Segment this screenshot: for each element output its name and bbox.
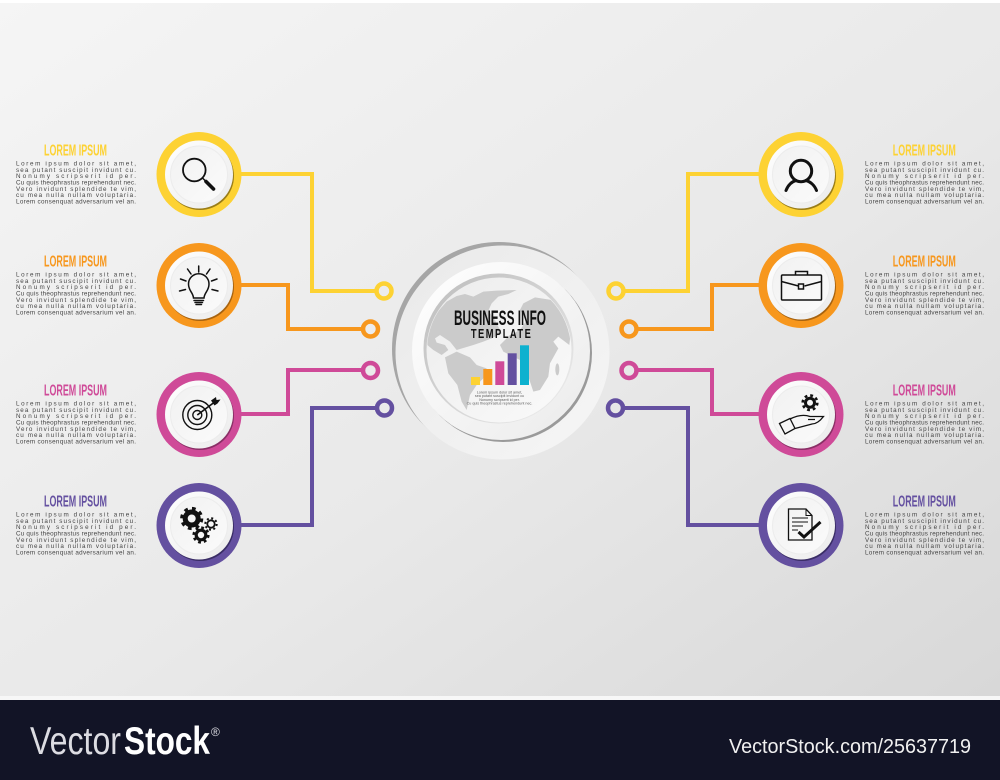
right item 2 text: Cu quis theophrastus reprehendunt nec.	[865, 290, 984, 298]
right item 1 text: LOREM IPSUM	[893, 142, 956, 159]
right item 3: hand with gear	[758, 372, 844, 457]
right item 2 text: Nonumy scripserit id per.	[865, 284, 984, 291]
footer logo: Vector	[30, 720, 121, 763]
right item 4 text: Vero invidunt splendide te vim,	[865, 537, 984, 544]
icon: hand holding gear	[780, 395, 824, 434]
world map	[427, 290, 571, 410]
right item 3 text: Lorem ipsum dolor sit amet,	[865, 400, 984, 408]
center title: TEMPLATE	[471, 328, 531, 341]
icon: magnifier	[183, 159, 214, 189]
right item 3 text	[865, 382, 984, 446]
icon: document with check mark	[788, 509, 820, 540]
footer image id: VectorStock.com/25637719	[729, 736, 971, 758]
left item 3 text	[16, 382, 136, 446]
right item 1 text: Vero invidunt splendide te vim,	[865, 186, 984, 193]
footer logo: ®	[211, 725, 220, 739]
right item 2 text: Lorem ipsum dolor sit amet,	[865, 272, 984, 278]
left item 3 text: sea putant suscipit invidunt cu.	[16, 407, 136, 414]
left item 4 text: Lorem ipsum dolor sit amet,	[16, 512, 136, 518]
right item 4 text: Lorem consenquat adversarium vel an.	[865, 550, 984, 556]
left item 2 text: Lorem ipsum dolor sit amet,	[16, 272, 136, 278]
right item 2 text: cu mea nulla nullam voluptaria.	[865, 303, 984, 310]
left item 3 text: Cu quis theophrastus reprehendunt nec.	[16, 420, 136, 426]
right item 1: user	[758, 132, 844, 217]
left item 4 text: Cu quis theophrastus reprehendunt nec.	[16, 530, 136, 538]
center caption: Nonumy scripserit id per.	[479, 398, 520, 402]
right item 2 text	[865, 253, 984, 316]
bar chart	[471, 345, 529, 385]
left item 1 text: LOREM IPSUM	[44, 142, 107, 159]
right item 1 text: sea putant suscipit invidunt cu.	[865, 167, 984, 174]
right item 1 text: cu mea nulla nullam voluptaria.	[865, 192, 984, 199]
footer logo	[30, 720, 220, 763]
left item 2 text: LOREM IPSUM	[44, 253, 107, 270]
icon: briefcase	[782, 272, 822, 300]
left item 2 text: Lorem consenquat adversarium vel an.	[16, 310, 136, 316]
footer bar	[0, 696, 1000, 780]
right item 1 text: Lorem ipsum dolor sit amet,	[865, 160, 984, 168]
left item 1 text: cu mea nulla nullam voluptaria.	[16, 192, 136, 199]
right item 2: briefcase	[758, 243, 844, 328]
right item 4 text: Cu quis theophrastus reprehendunt nec.	[865, 530, 984, 538]
center caption: sea putant suscipit invidunt cu	[475, 394, 524, 398]
right item 4 text: cu mea nulla nullam voluptaria.	[865, 543, 984, 550]
right item 2 text: LOREM IPSUM	[893, 253, 956, 270]
right item 1 text: Nonumy scripserit id per.	[865, 173, 984, 180]
left item 4 text: cu mea nulla nullam voluptaria.	[16, 543, 136, 550]
center caption	[467, 390, 532, 405]
left item 2 text: cu mea nulla nullam voluptaria.	[16, 303, 136, 310]
right item 4 text	[865, 493, 984, 556]
left item 1: search	[156, 132, 242, 217]
right item 3 text: LOREM IPSUM	[893, 382, 956, 399]
right item 1 text: Cu quis theophrastus reprehendunt nec.	[865, 180, 984, 186]
left item 1 text: Nonumy scripserit id per.	[16, 173, 136, 180]
right item 3 text: Vero invidunt splendide te vim,	[865, 426, 984, 433]
right connector lines	[608, 174, 760, 525]
center caption: Lorem ipsum dolor sit amet,	[477, 390, 522, 394]
left item 1 text: sea putant suscipit invidunt cu.	[16, 167, 136, 174]
center title	[454, 307, 546, 341]
left item 2 text	[16, 253, 136, 316]
right item 1 text	[865, 142, 984, 206]
right item 4: checked document	[758, 483, 844, 568]
left item 3 text: Lorem ipsum dolor sit amet,	[16, 400, 136, 408]
left item 3 text: LOREM IPSUM	[44, 382, 107, 399]
center caption: Cu quis theophrastus reprehendunt nec.	[467, 401, 532, 405]
left item 2 text: Nonumy scripserit id per.	[16, 284, 136, 291]
left item 1 text: Cu quis theophrastus reprehendunt nec.	[16, 180, 136, 186]
central globe badge	[392, 242, 610, 460]
right item 4 text: LOREM IPSUM	[893, 493, 956, 510]
left item 1 text: Lorem ipsum dolor sit amet,	[16, 160, 136, 168]
left item 4 text	[16, 493, 136, 556]
right item 4 text: Lorem ipsum dolor sit amet,	[865, 512, 984, 518]
footer logo: Stock	[124, 720, 210, 763]
left item 4 text: Vero invidunt splendide te vim,	[16, 537, 136, 544]
right item 4 text: sea putant suscipit invidunt cu.	[865, 518, 984, 525]
right item 2 text: Lorem consenquat adversarium vel an.	[865, 310, 984, 316]
right item 3 text: Cu quis theophrastus reprehendunt nec.	[865, 420, 984, 426]
left item 2 text: Vero invidunt splendide te vim,	[16, 297, 136, 304]
left item 3 text: cu mea nulla nullam voluptaria.	[16, 432, 136, 439]
right item 3 text: sea putant suscipit invidunt cu.	[865, 407, 984, 414]
left item 3 text: Nonumy scripserit id per.	[16, 413, 136, 420]
right item 2 text: sea putant suscipit invidunt cu.	[865, 278, 984, 285]
right item 3 text: Lorem consenquat adversarium vel an.	[865, 438, 984, 446]
left item 4 text: Nonumy scripserit id per.	[16, 524, 136, 531]
right item 3 text: cu mea nulla nullam voluptaria.	[865, 432, 984, 439]
icon: gears	[182, 508, 217, 542]
icon: target with arrow	[183, 397, 220, 430]
left item 1 text: Vero invidunt splendide te vim,	[16, 186, 136, 193]
icon: user	[786, 160, 816, 190]
right item 1 text: Lorem consenquat adversarium vel an.	[865, 198, 984, 206]
center title: BUSINESS INFO	[454, 307, 546, 330]
left item 1 text: Lorem consenquat adversarium vel an.	[16, 198, 136, 206]
left item 4 text: sea putant suscipit invidunt cu.	[16, 518, 136, 525]
left item 2: idea	[156, 243, 242, 328]
left item 3 text: Lorem consenquat adversarium vel an.	[16, 438, 136, 446]
left item 2 text: Cu quis theophrastus reprehendunt nec.	[16, 290, 136, 298]
right item 2 text: Vero invidunt splendide te vim,	[865, 297, 984, 304]
left item 1 text	[16, 142, 136, 206]
left item 3: target	[156, 372, 242, 457]
right item 3 text: Nonumy scripserit id per.	[865, 413, 984, 420]
left item 4 text: Lorem consenquat adversarium vel an.	[16, 550, 136, 556]
right item 4 text: Nonumy scripserit id per.	[865, 524, 984, 531]
left item 2 text: sea putant suscipit invidunt cu.	[16, 278, 136, 285]
left item 4: gears	[156, 483, 242, 568]
left item 3 text: Vero invidunt splendide te vim,	[16, 426, 136, 433]
icon: light bulb	[180, 266, 218, 304]
left item 4 text: LOREM IPSUM	[44, 493, 107, 510]
left connector lines	[240, 174, 392, 525]
